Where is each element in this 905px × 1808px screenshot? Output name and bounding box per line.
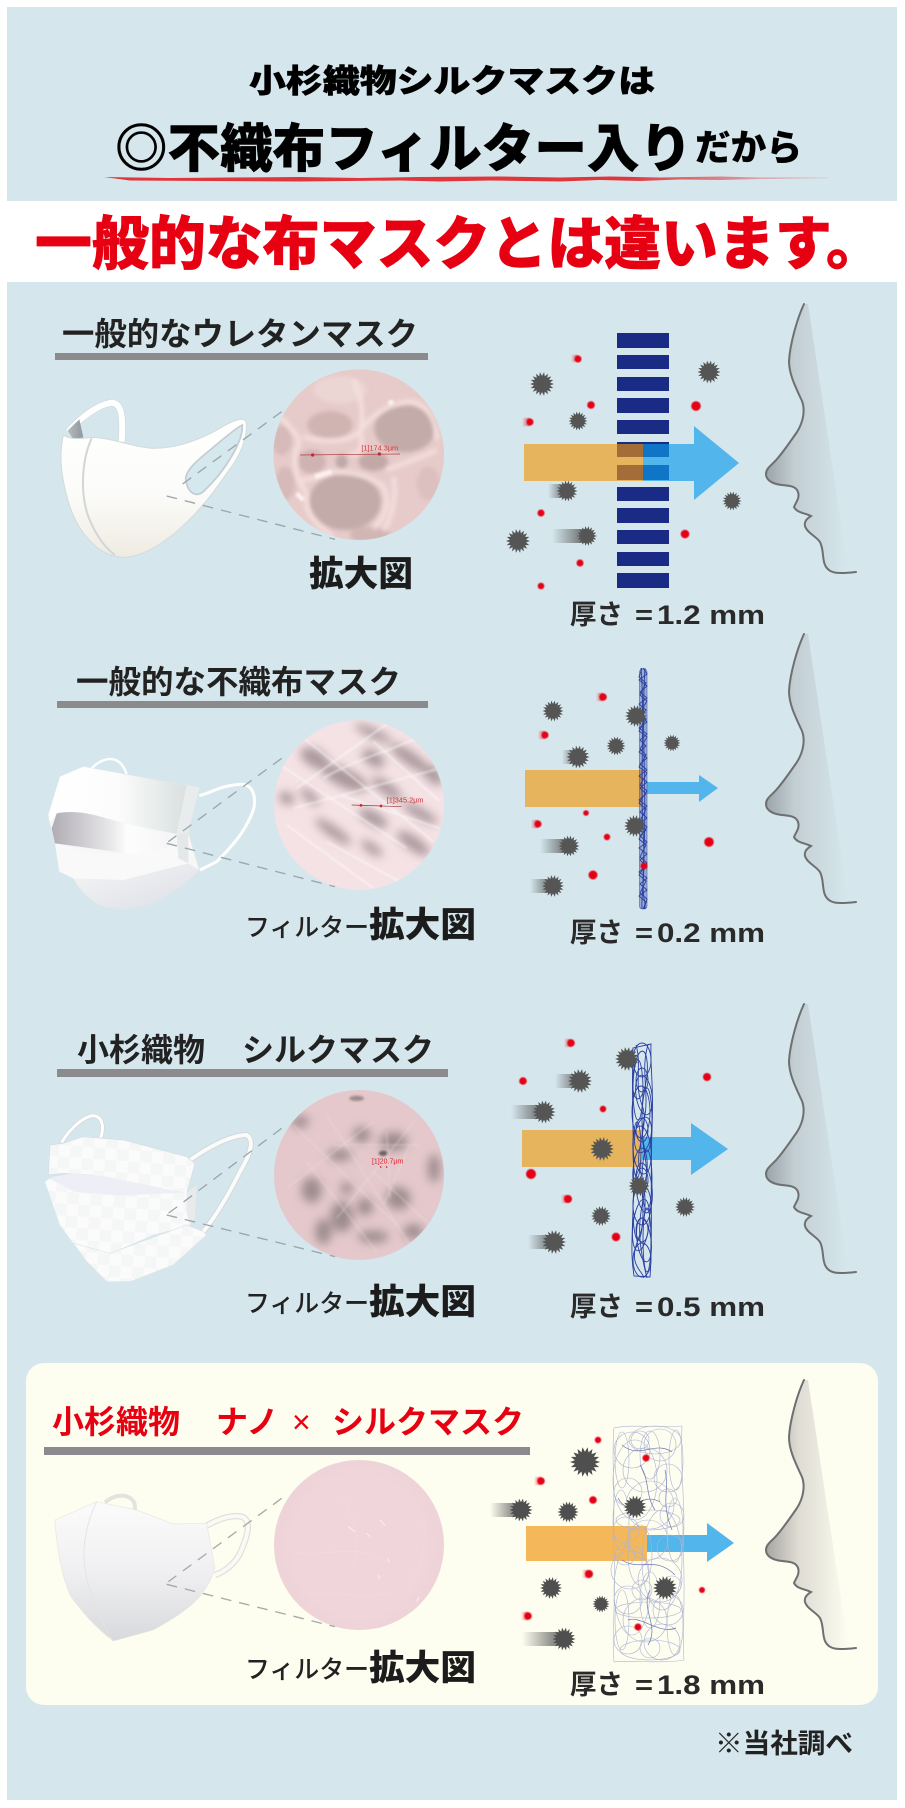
panel: silk mask <box>45 1004 856 1322</box>
particles <box>511 1047 695 1254</box>
label: filter magnified view: 拡大図 <box>369 1649 476 1688</box>
arrow: air out <box>643 426 739 500</box>
thickness label <box>570 1670 765 1700</box>
arrow: air out <box>647 775 718 802</box>
air in block <box>524 444 643 481</box>
thickness label: = <box>635 1292 653 1322</box>
label: filter magnified view: 拡大図 <box>369 1283 476 1322</box>
zoom guide lines <box>167 1128 335 1257</box>
section title: 一般的な不織布マスク <box>76 664 401 700</box>
label: filter magnified view: フィルター <box>245 1290 369 1318</box>
thickness label <box>570 600 765 630</box>
title rule <box>55 353 428 360</box>
scale marker: [1]174.3μm <box>361 444 398 453</box>
thickness label: = <box>635 600 653 630</box>
air in block <box>525 770 643 807</box>
woven filter <box>630 1043 655 1278</box>
white band <box>0 201 905 282</box>
label: filter magnified view: フィルター <box>245 914 369 942</box>
heading: brand line: 小杉織物シルクマスクは <box>249 63 655 99</box>
thickness label: 1.8 mm <box>657 1670 765 1700</box>
zoom guide lines <box>167 412 335 539</box>
zoom guide lines <box>167 1498 335 1627</box>
section title: × <box>292 1404 311 1440</box>
particles <box>490 1447 677 1650</box>
thickness label <box>570 1292 765 1322</box>
cream card <box>26 1363 878 1705</box>
scale marker: [1]345.2μm <box>387 796 423 805</box>
icon: 3D mask <box>55 1496 248 1641</box>
mask and magnified circle <box>48 719 447 909</box>
magnified foam circle <box>272 369 444 543</box>
section title: ナノ <box>216 1404 278 1440</box>
filter bars <box>617 333 669 588</box>
face profile <box>766 634 856 903</box>
air in block <box>526 1526 647 1561</box>
icon: pleated mask <box>48 759 255 909</box>
thickness label: = <box>635 1670 653 1700</box>
face profile <box>766 1380 856 1649</box>
thickness label: 1.2 mm <box>657 600 765 630</box>
thickness label: 厚さ <box>570 600 623 630</box>
panel: nano silk mask <box>26 1363 878 1705</box>
face profile <box>766 304 856 573</box>
face profile <box>766 1004 856 1273</box>
section title: シルクマスク <box>242 1032 434 1068</box>
heading: filter line: ◎不織布フィルター入り <box>115 121 692 179</box>
magnified fibre circle <box>273 719 447 890</box>
diagram: airflow through silk <box>511 1039 728 1278</box>
thickness label: = <box>635 918 653 948</box>
footnote: ※当社調べ <box>715 1729 853 1759</box>
thickness label: 厚さ <box>570 918 623 948</box>
overlap tints <box>617 444 669 480</box>
title rule <box>57 701 428 708</box>
thickness label: 厚さ <box>570 1292 623 1322</box>
panel: urethane mask <box>55 304 856 630</box>
label: filter magnified view <box>245 1283 476 1322</box>
heading: filter line: だから <box>695 127 802 168</box>
label: filter magnified view <box>245 1649 476 1688</box>
red brush underline <box>104 176 828 182</box>
particles <box>530 701 680 897</box>
section title: 小杉織物 <box>52 1404 180 1440</box>
diagram: airflow through foam <box>506 333 742 589</box>
magnified silk circle <box>273 1459 444 1630</box>
section title: シルクマスク <box>332 1404 524 1440</box>
arrow: air out <box>642 1123 728 1175</box>
section title: 一般的なウレタンマスク <box>62 316 418 352</box>
label: magnified view: 拡大図 <box>309 555 413 594</box>
mask and magnified circle <box>45 1089 444 1282</box>
arrow: air out <box>647 1523 734 1562</box>
particles <box>506 361 742 553</box>
mask and magnified circle <box>61 369 444 557</box>
title rule <box>44 1447 530 1455</box>
icon: urethane mask <box>61 403 246 557</box>
diagram: airflow through nonwoven <box>525 668 718 909</box>
icon: silk pleated mask <box>45 1116 251 1282</box>
diagram: airflow through nano filter <box>490 1426 734 1662</box>
air in block <box>522 1130 642 1167</box>
title rule <box>57 1069 448 1077</box>
thickness label: 0.2 mm <box>657 918 765 948</box>
heading: red headline: 一般的な布マスクとは違います。 <box>35 212 883 277</box>
thickness label <box>570 918 765 948</box>
thickness label: 0.5 mm <box>657 1292 765 1322</box>
header block <box>104 63 828 182</box>
scale marker <box>352 797 423 808</box>
label: filter magnified view: フィルター <box>245 1656 369 1684</box>
thin filter <box>639 668 647 909</box>
scale marker: [1]20.7μm <box>372 1159 403 1166</box>
scale marker <box>300 444 400 457</box>
mask and magnified circle <box>55 1459 444 1641</box>
label: filter magnified view: 拡大図 <box>369 906 476 945</box>
panel: nonwoven mask <box>48 634 856 948</box>
magnified fibre circle <box>273 1089 444 1260</box>
nano filter web <box>611 1426 684 1662</box>
thickness label: 厚さ <box>570 1670 623 1700</box>
section title: 小杉織物 <box>77 1032 205 1068</box>
label: filter magnified view <box>245 906 476 945</box>
zoom guide lines <box>167 758 335 887</box>
